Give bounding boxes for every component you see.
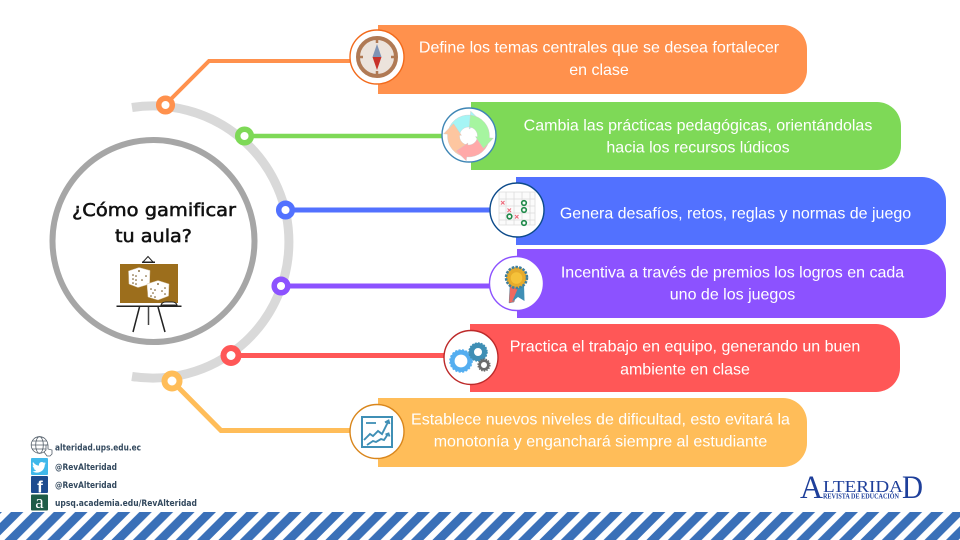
logo: Alteridad: A [800,470,823,506]
icon: die two [147,280,169,300]
footer icon: facebook: f [37,478,43,496]
footer icon: twitter [31,458,48,475]
connector: red [224,348,450,363]
text: bar 4: Incentiva a través de premios los logros en cada [561,265,904,282]
central circle [52,140,254,342]
connector: yellow [164,374,360,430]
logo: Alteridad: D [902,470,923,506]
logo: Alteridad [800,470,923,506]
connector: blue [279,203,500,217]
text: bar 3: Genera desafíos, retos, reglas y normas de juego [560,205,911,222]
footer icon: academia [31,492,48,513]
panel: bar 2 green [471,102,901,170]
footer text: twitter: @RevAlteridad [55,463,117,473]
icon: easel with dice [116,256,182,332]
panel: bar 3 blue [516,177,946,245]
text: bar 1: Define los temas centrales que se desea fortalecer [419,39,780,56]
icon: compass [350,30,404,84]
text: bar 5: Practica el trabajo en equipo, generando un buen [510,338,860,355]
icon: die one [128,268,150,288]
text: bar 4: uno de los juegos [670,287,795,304]
text: bar 2: hacia los recursos lúdicos [606,139,790,156]
icon: gears [444,330,498,384]
heading: ¿Cómo gamificar [72,200,237,221]
connector: purple [274,279,500,293]
heading [72,200,237,247]
panel: bar 5 red [470,324,900,392]
connector: green [238,129,450,143]
icon: medal [490,256,544,310]
text: bar 5: ambiente en clase [620,361,750,378]
footer icon: academia: a [35,492,44,513]
text: bar 6: Establece nuevos niveles de dificultad, esto evitará la [411,411,790,428]
logo: Alteridad: LTERIDA [823,477,904,496]
text: bar 6: monotonía y enganchará siempre al estudiante [434,433,767,450]
panel: bar 1 orange [378,25,807,94]
heading: tu aula? [115,226,192,247]
footer text: website: alteridad.ups.edu.ec [55,444,141,454]
panel: bar 4 purple [517,249,946,318]
icon: cycle arrows [442,108,496,163]
icon: tic tac toe grid [490,183,544,237]
text: bar 2: Cambia las prácticas pedagógicas, orientándolas [524,117,872,134]
text: bar 1: en clase [569,62,629,79]
footer text: academia: upsq.academia.edu/RevAlteridad [55,499,197,509]
logo: Alteridad: REVISTA DE EDUCACIÓN [823,490,899,500]
gray outer arc [132,106,289,378]
connector: orange [159,61,360,112]
footer icon: globe [31,437,52,456]
striped footer band [0,512,960,540]
icon: growth chart [350,404,404,458]
panel: bar 6 yellow [378,398,807,467]
footer text: facebook: @RevAlteridad [55,481,117,491]
footer icon: facebook [31,476,48,496]
